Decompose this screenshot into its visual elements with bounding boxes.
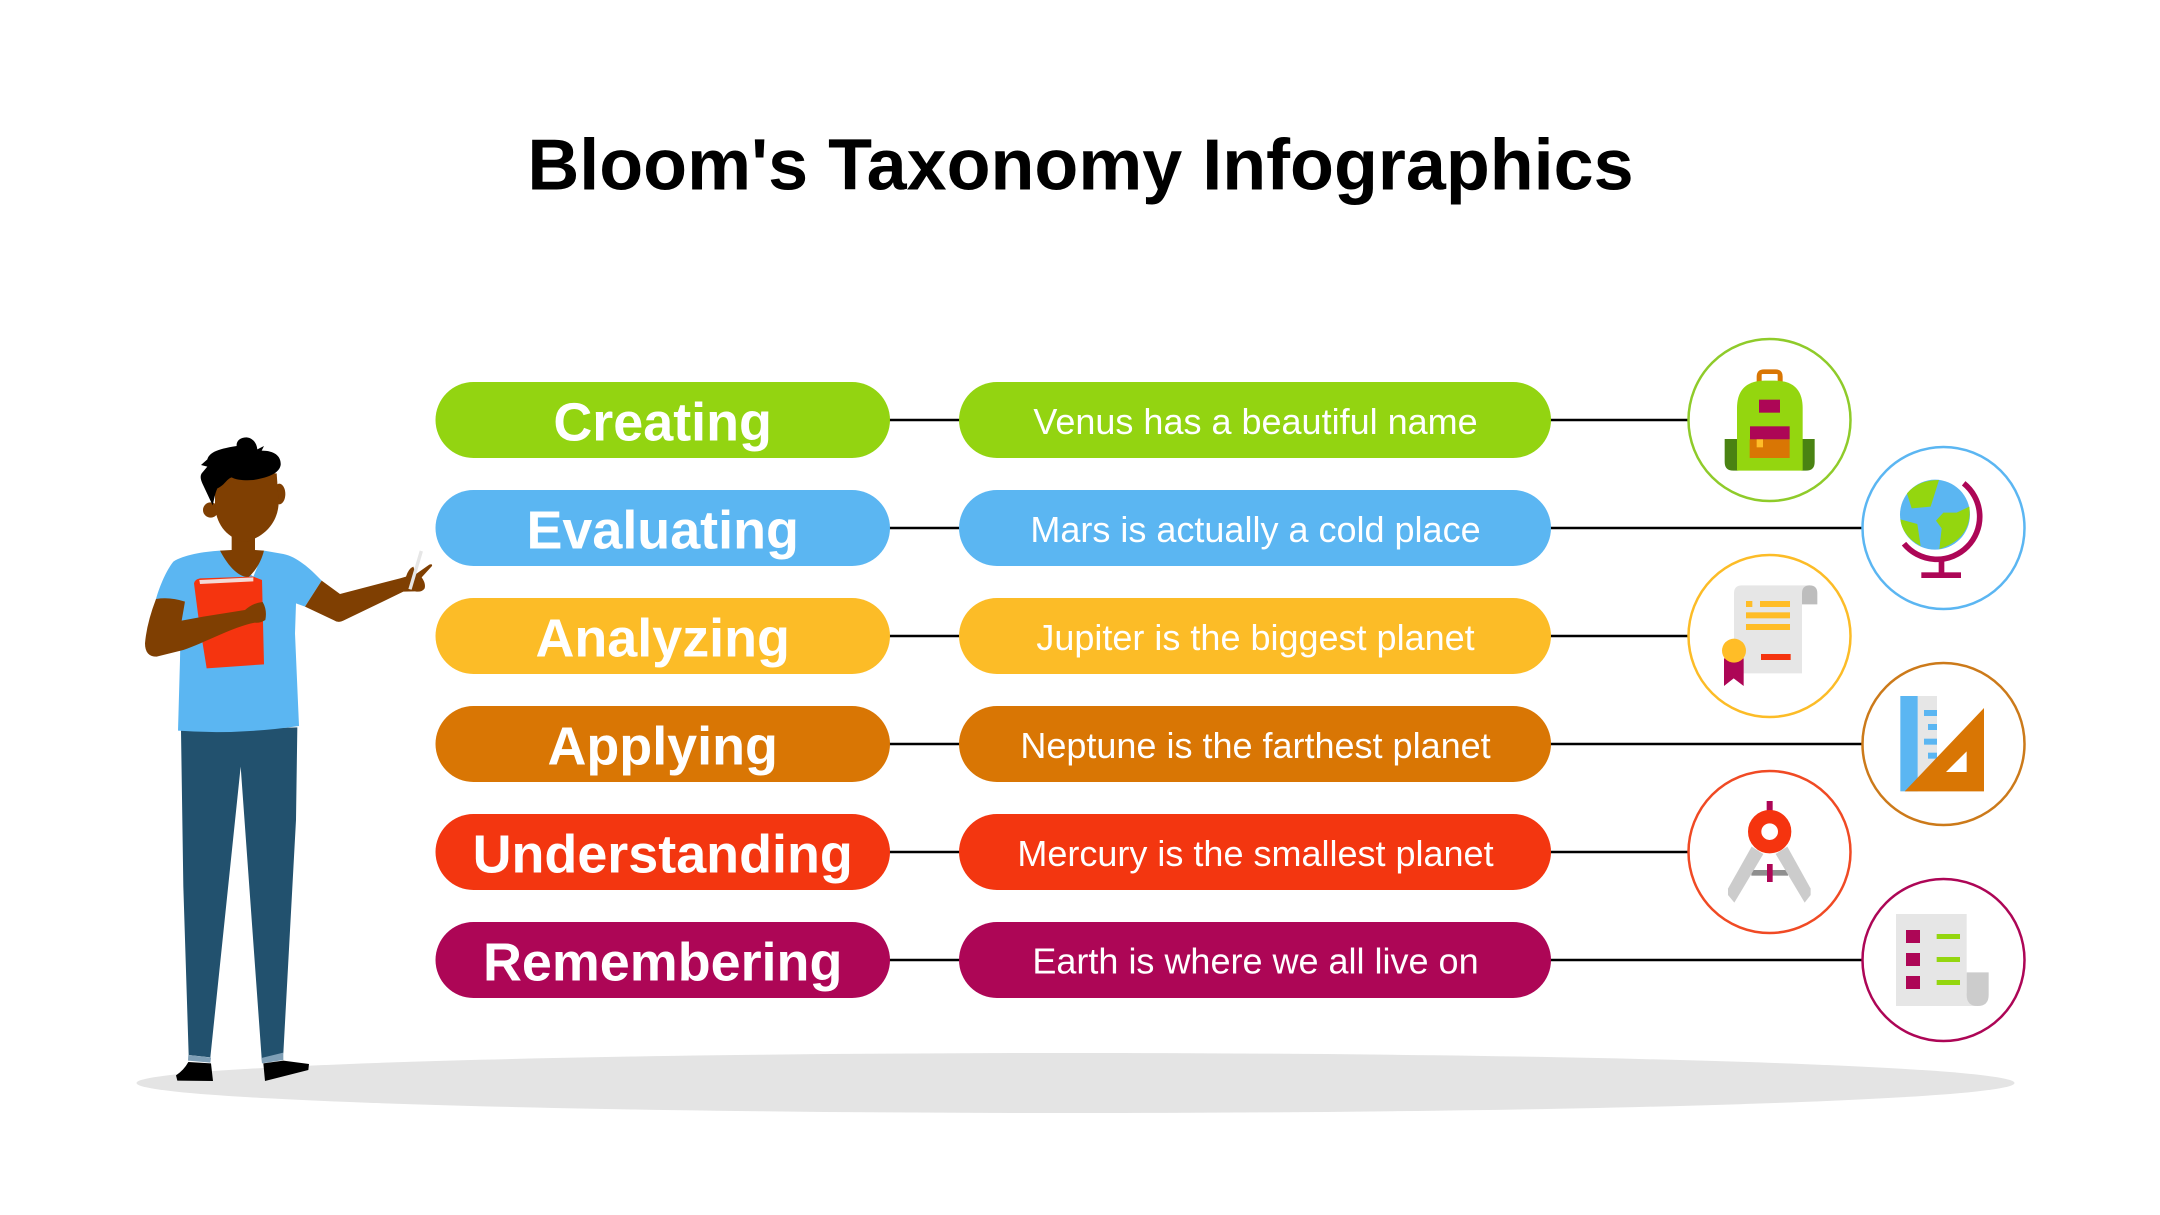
row: Creating: Creating xyxy=(553,392,772,452)
row: Understanding: Mercury is the smallest planet xyxy=(1017,833,1494,874)
icon: backpack xyxy=(1688,339,1850,501)
neck xyxy=(220,532,264,577)
icon: certificate xyxy=(1688,555,1850,717)
shirt xyxy=(156,551,322,732)
row: Applying xyxy=(436,706,1551,782)
hair xyxy=(201,437,281,505)
row: Understanding xyxy=(436,814,1551,890)
legs and shoes xyxy=(176,727,309,1081)
row: Analyzing: Jupiter is the biggest planet xyxy=(1036,617,1475,658)
chalk xyxy=(410,551,421,589)
row: Analyzing xyxy=(436,598,1551,674)
upper body xyxy=(145,437,432,732)
row: Applying: Applying xyxy=(547,716,778,776)
row: Analyzing: Analyzing xyxy=(535,608,790,668)
right arm xyxy=(305,564,432,622)
ears and face xyxy=(203,502,218,518)
icon: globe xyxy=(1862,447,2024,609)
row: Understanding: Understanding xyxy=(473,824,853,884)
row: Creating: Venus has a beautiful name xyxy=(1033,401,1478,442)
row: Remembering: Earth is where we all live on xyxy=(1032,940,1479,982)
row: Evaluating: Mars is actually a cold place xyxy=(1030,509,1481,550)
connector lines xyxy=(885,420,1863,960)
row: Remembering xyxy=(436,922,1551,998)
row: Evaluating xyxy=(436,490,1551,566)
icon: drawing compass xyxy=(1688,771,1850,933)
icon: ruler and set square xyxy=(1862,663,2024,825)
row: Remembering: Remembering xyxy=(483,932,842,992)
title: Bloom's Taxonomy Infographics xyxy=(527,126,1634,206)
figure: student holding a book xyxy=(145,437,432,1081)
row: Evaluating: Evaluating xyxy=(526,500,799,560)
row: Applying: Neptune is the farthest planet xyxy=(1020,725,1491,766)
left arm xyxy=(145,598,266,657)
ground shadow xyxy=(136,1053,2014,1113)
book xyxy=(194,577,264,668)
row: Creating xyxy=(436,382,1551,458)
icon: checklist xyxy=(1862,879,2024,1041)
